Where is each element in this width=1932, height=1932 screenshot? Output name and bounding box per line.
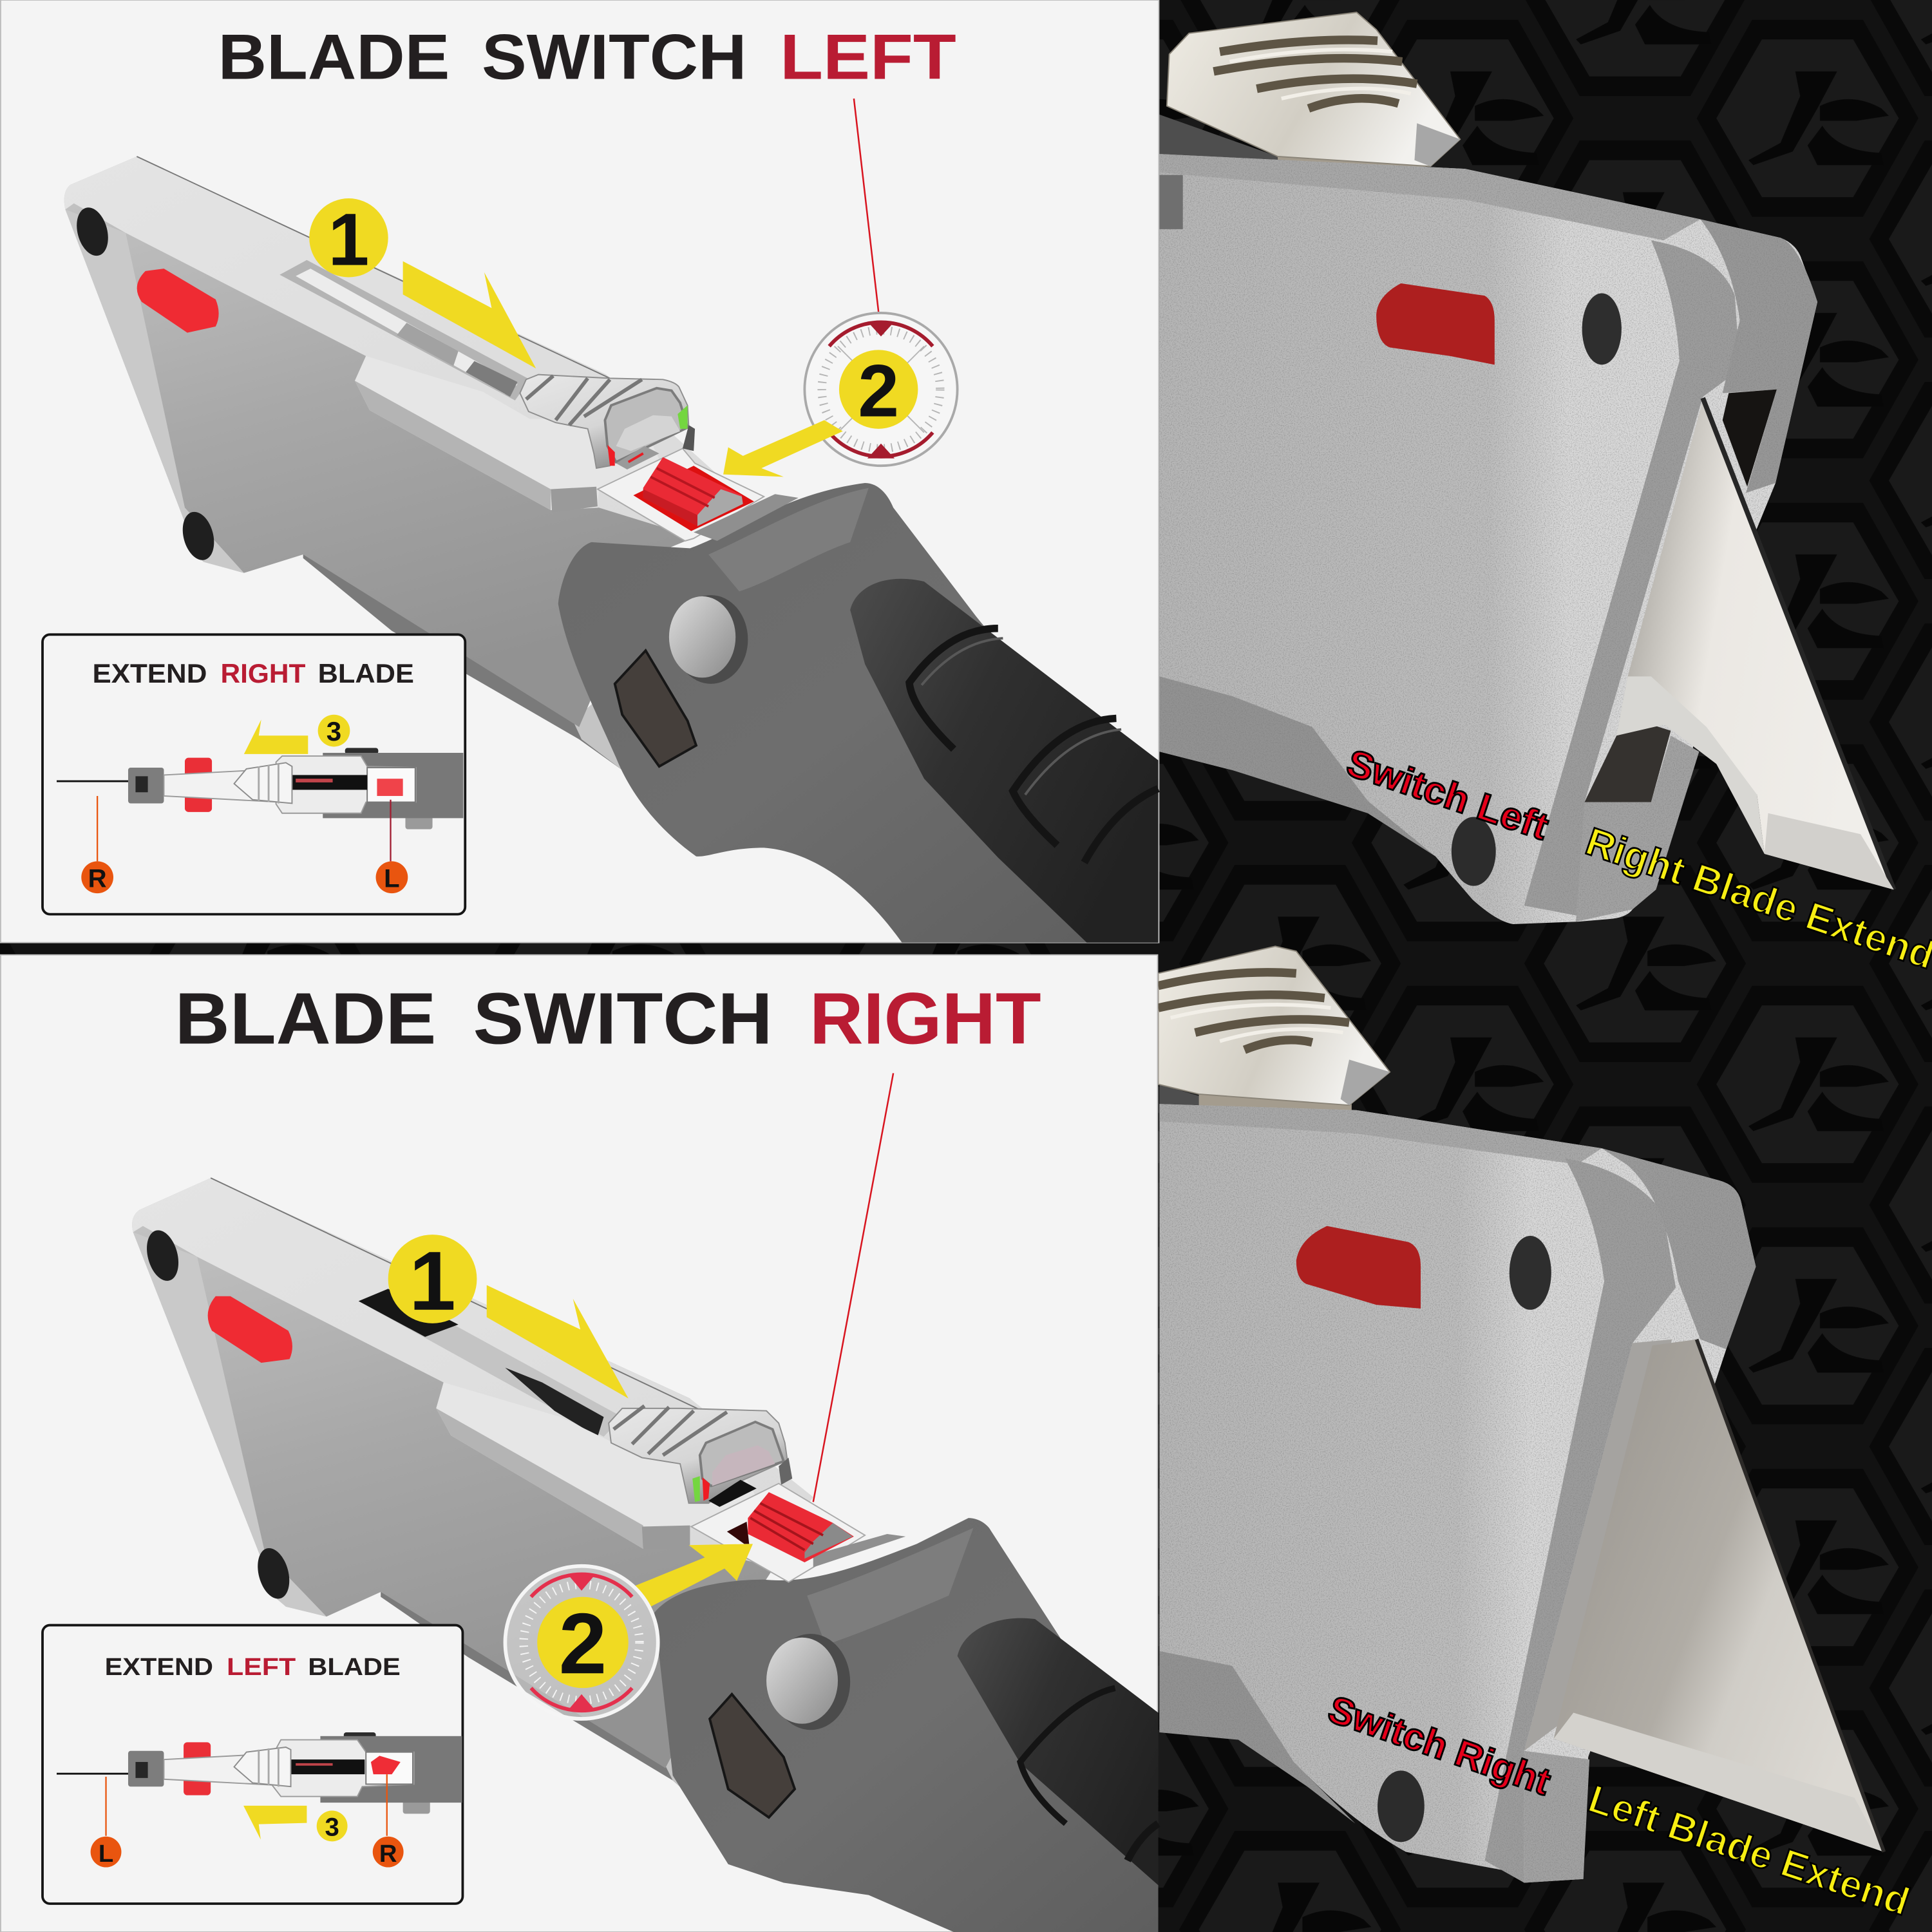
badge 3 (317, 1811, 348, 1842)
upper edge band (1159, 1104, 1602, 1164)
lower corner block (1524, 1751, 1589, 1882)
grip (958, 1618, 1158, 1885)
label: right blade extend: Right Blade Extend (1580, 819, 1932, 978)
leader line (854, 99, 878, 312)
mini knife (57, 1732, 462, 1814)
red side button (1296, 1226, 1421, 1309)
right blade (1616, 398, 1894, 889)
title: BLADE (175, 978, 436, 1059)
badge 3 (318, 715, 350, 746)
red side button (1376, 283, 1495, 365)
handle (558, 483, 1158, 943)
marker R (373, 1774, 404, 1868)
red switch (727, 1492, 854, 1562)
label: switch right: Switch Right (1323, 1687, 1557, 1803)
label: left blade extend: Left Blade Extend (1583, 1776, 1915, 1924)
screw hole lower (252, 1544, 294, 1602)
badge 1: 1 (328, 198, 369, 281)
pivot pin (669, 595, 748, 684)
dial with badge 2: 2 (858, 350, 899, 433)
metal rim (1484, 1158, 1676, 1882)
screw hole lower (1452, 817, 1496, 886)
red pin (208, 1296, 292, 1363)
blade slot (279, 260, 530, 401)
knife illustration (64, 156, 1158, 943)
screw hole upper (1582, 293, 1622, 365)
badge 3: 3 (327, 716, 341, 746)
screw hole upper (71, 204, 113, 260)
top plate (355, 356, 695, 537)
switch frame (691, 1484, 865, 1582)
badge 1 (388, 1234, 477, 1328)
badge 3: 3 (325, 1813, 339, 1842)
small slot (616, 446, 659, 469)
inset title: RIGHT (220, 658, 306, 688)
inset title: EXTEND (105, 1653, 213, 1681)
grip (850, 579, 1158, 943)
screw hole upper (1510, 1236, 1551, 1310)
title (175, 978, 1041, 1059)
title: LEFT (780, 21, 956, 93)
red switch (633, 457, 754, 531)
rear plate (1602, 1148, 1756, 1349)
underside (303, 548, 622, 770)
dial with badge 2 (505, 1566, 658, 1719)
knife illustration (132, 1178, 1158, 1932)
title: RIGHT (810, 978, 1041, 1059)
mini knife (57, 748, 463, 829)
blade opening (1723, 390, 1777, 487)
thumb slider photo top (1159, 12, 1460, 193)
lower block (1576, 735, 1699, 922)
arrow 3 (243, 1806, 307, 1840)
marker L: L (99, 1840, 113, 1868)
grey clip (813, 1534, 905, 1567)
inset title (92, 658, 414, 688)
plate end block (551, 487, 598, 513)
title (218, 21, 956, 93)
label: switch left: Switch Left (1341, 741, 1554, 848)
marker L (376, 800, 408, 893)
screw hole lower (1378, 1770, 1425, 1842)
top surface (64, 156, 752, 537)
marker R: R (379, 1840, 397, 1868)
arrow 1 (403, 261, 536, 368)
lower slot (1584, 724, 1671, 802)
arrow 2 (632, 1544, 753, 1607)
upper edge band (1159, 154, 1700, 240)
panel: top-right photo, switch left (1159, 12, 1932, 978)
badge 1 (309, 198, 388, 281)
black slot (708, 1480, 757, 1507)
arrow 1 (487, 1285, 629, 1399)
panel: bottom-right photo, switch right (1158, 946, 1915, 1924)
panel: blade switch left (1, 0, 1159, 943)
screw hole lower (178, 508, 219, 564)
lower bevel (1159, 1651, 1356, 1824)
dark notch (1159, 175, 1183, 229)
marker L (91, 1777, 121, 1868)
arrow 2 (723, 420, 843, 477)
dial with badge 2: 2 (559, 1596, 607, 1692)
left bevel (133, 1232, 327, 1616)
badge 1: 1 (409, 1234, 456, 1328)
clip (779, 1457, 792, 1484)
title: SWITCH (482, 21, 746, 93)
marker L: L (384, 864, 400, 893)
inset title: EXTEND (92, 658, 207, 688)
inset: extend left blade (43, 1625, 462, 1904)
thumb slider (520, 375, 695, 469)
switch frame (598, 448, 764, 541)
handle (654, 1518, 1158, 1932)
handle highlight (807, 1528, 973, 1645)
clip (683, 425, 695, 451)
rear plate (1700, 220, 1817, 493)
top surface (132, 1178, 813, 1565)
plate end block (642, 1526, 690, 1549)
inset: extend right blade (43, 634, 465, 914)
top edge line (211, 1178, 705, 1412)
handle highlight (708, 488, 869, 591)
grey clip (694, 494, 799, 541)
body face (64, 156, 695, 727)
title: BLADE (218, 21, 450, 93)
underside (381, 1589, 714, 1816)
knife body photo (1159, 154, 1817, 924)
blade slot (359, 1289, 622, 1437)
hex magnet (615, 650, 696, 766)
body face (132, 1178, 784, 1768)
inset title (105, 1653, 401, 1681)
screw hole upper (142, 1227, 184, 1284)
lower bevel (1159, 676, 1435, 857)
marker R: R (88, 864, 107, 893)
dial with badge 2 (804, 313, 958, 466)
inset title: BLADE (318, 658, 414, 688)
left blade (1524, 1340, 1884, 1852)
hex magnet (710, 1694, 795, 1817)
red pin (137, 269, 219, 333)
knife body photo (1159, 1104, 1756, 1882)
title: SWITCH (473, 978, 773, 1059)
inset title: LEFT (227, 1653, 296, 1681)
marker R (81, 796, 113, 893)
top plate (436, 1383, 788, 1558)
pivot pin (766, 1634, 850, 1730)
left bevel (65, 209, 244, 573)
inset title: BLADE (308, 1653, 401, 1681)
thumb slider photo bottom (1158, 946, 1390, 1132)
arrow 3 (244, 719, 308, 754)
panel: blade switch right (1, 955, 1158, 1932)
top edge line (137, 156, 610, 378)
thumb slider (609, 1406, 792, 1507)
metal rim (1524, 240, 1740, 918)
leader line (813, 1073, 893, 1502)
